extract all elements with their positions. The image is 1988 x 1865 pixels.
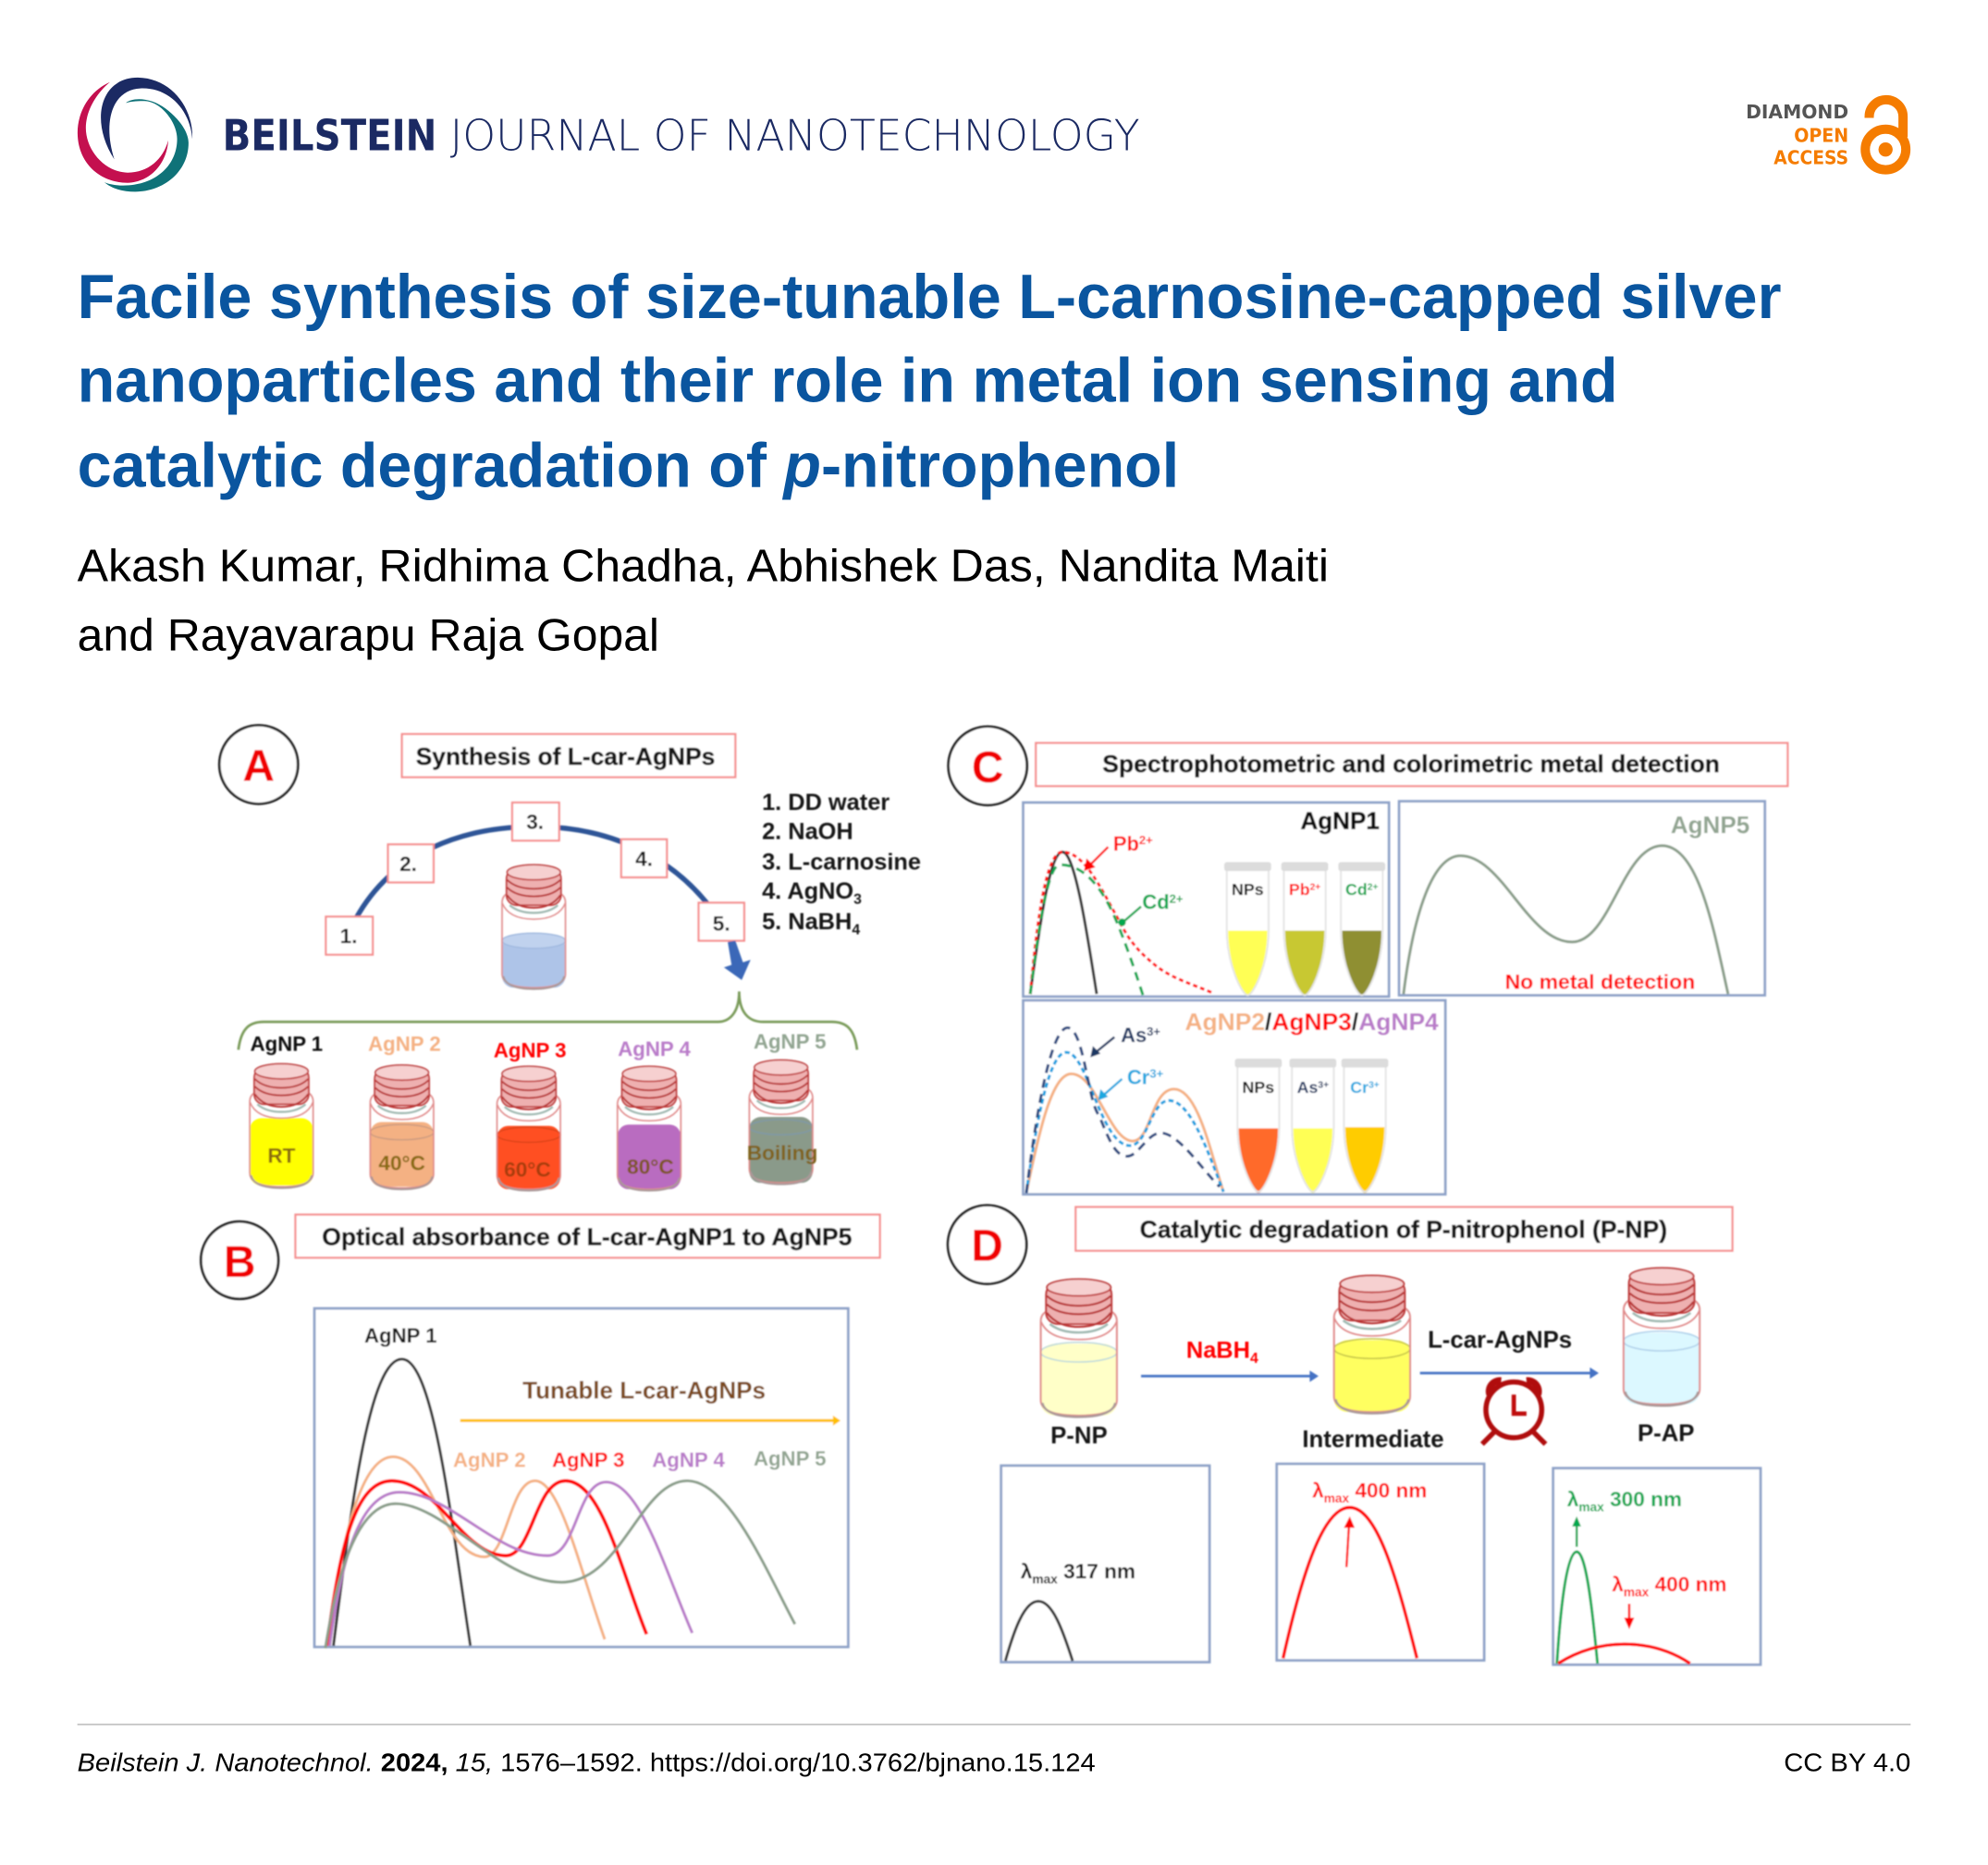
AgNP labels: AgNP 4 (618, 1037, 691, 1061)
step boxes 1 to 5 (325, 803, 744, 954)
series labels: AgNP 3 (552, 1448, 625, 1471)
Pb label and arrow (1084, 832, 1153, 871)
spectrum P-AP: max (1578, 1500, 1604, 1514)
spectrum P-NP: 317 nm (1058, 1560, 1135, 1583)
footer citation: Beilstein J. Nanotechnol. 2024, 15, 1576–1592. https://doi.org/10.3762/bjnano.15.124 (78, 1748, 1096, 1777)
spectrum intermediate: 400 nm (1349, 1479, 1427, 1502)
panel letter B (201, 1221, 278, 1299)
diamond open access label: ACCESS (1773, 146, 1848, 168)
Cr label and arrow (1098, 1065, 1164, 1100)
spectrum P-AP: λ (1567, 1488, 1578, 1511)
bottle labels: Intermediate (1302, 1427, 1444, 1453)
bottle AgNP 4 (618, 1066, 681, 1191)
tube Pb: 2+ (1310, 883, 1320, 893)
AgNP labels (251, 1030, 827, 1062)
panel letter D (948, 1205, 1026, 1283)
journal name: JOURNAL OF NANOTECHNOLOGY (450, 111, 1140, 161)
bottle P-NP (1041, 1279, 1117, 1417)
temperature labels (267, 1142, 817, 1181)
heading A: Synthesis of L-car-AgNPs (416, 742, 715, 770)
tube NPs: NPs (1232, 880, 1264, 899)
graphical abstract figure (201, 725, 1787, 1664)
tube Pb: Pb (1289, 880, 1310, 899)
spectrum P-NP: max (1032, 1573, 1058, 1587)
tube NPs (1235, 1059, 1282, 1193)
NaBH4 label: NaBH (1186, 1338, 1250, 1364)
spectrum P-AP (1553, 1468, 1761, 1664)
series labels: AgNP 2 (453, 1448, 526, 1471)
As label and arrow: As (1121, 1024, 1147, 1047)
tube As: As (1297, 1078, 1318, 1097)
tube Pb (1282, 862, 1328, 995)
icon: open access padlock (1865, 100, 1906, 170)
reagent list: 2. NaOH (762, 819, 853, 845)
panel letter C: C (972, 743, 1003, 792)
AgNP labels: AgNP 5 (754, 1030, 827, 1053)
heading C (1036, 743, 1787, 786)
AgNP labels: AgNP 2 (368, 1033, 441, 1056)
spectrum P-AP: 300 nm (1604, 1488, 1682, 1511)
spectrum intermediate: λ (1312, 1479, 1324, 1502)
reagent list: 1. DD water (762, 790, 890, 816)
AgNP labels: AgNP 1 (251, 1033, 323, 1056)
tube Cd (1338, 862, 1385, 995)
temperature labels: Boiling (747, 1142, 817, 1165)
journal name: BEILSTEIN (223, 111, 436, 161)
Cd label and arrow: Cd (1142, 890, 1170, 914)
journal logo: three swirl arcs (78, 78, 192, 191)
diamond open access label (1746, 101, 1848, 168)
bottle labels (1050, 1420, 1695, 1453)
tube Cd: Cd (1345, 880, 1368, 899)
step boxes 1 to 5: 5. (713, 912, 730, 935)
diamond open access label: OPEN (1794, 124, 1848, 146)
panel B: optical absorbance (201, 1215, 880, 1649)
tube Cr: 3+ (1368, 1080, 1380, 1090)
heading D: Catalytic degradation of P-nitrophenol (P-NP) (1140, 1215, 1667, 1243)
brace (239, 991, 857, 1049)
bottle intermediate (1334, 1275, 1410, 1414)
spectrum intermediate (1277, 1464, 1484, 1661)
title: nanoparticles and their role in metal ion sensing and (78, 347, 1618, 416)
arrow L-car-AgNPs (1420, 1368, 1599, 1379)
Pb label and arrow: 2+ (1139, 833, 1153, 847)
Cr label and arrow: 3+ (1149, 1066, 1164, 1080)
footer licence: CC BY 4.0 (1784, 1748, 1910, 1777)
panel D: catalytic degradation (948, 1205, 1761, 1664)
sub-panel AgNP1 (1024, 803, 1389, 997)
NaBH4 label: 4 (1250, 1351, 1258, 1367)
bottle labels: P-NP (1050, 1423, 1108, 1449)
sub-panel AgNP5 (1399, 802, 1765, 995)
Cr label and arrow: Cr (1127, 1065, 1149, 1088)
tube NPs: NPs (1243, 1078, 1274, 1097)
bottle labels: P-AP (1638, 1420, 1695, 1446)
panel letter C (949, 727, 1027, 805)
reagent list: 4. AgNO (762, 878, 853, 904)
arc of synthesis steps (356, 827, 713, 918)
bottle AgNP 1 (250, 1063, 313, 1188)
reagent list: 3. L-carnosine (762, 850, 921, 876)
absorbance chart (314, 1308, 848, 1649)
AgNP5 label: AgNP5 (1671, 811, 1749, 839)
AgNP2/3/4 label: AgNP2/AgNP3/AgNP4 (1184, 1008, 1439, 1036)
spectrum P-AP: max (1624, 1585, 1650, 1599)
temperature labels: 40°C (378, 1152, 425, 1175)
title: Facile synthesis of size-tunable L-carnosine-capped silver (78, 263, 1781, 332)
step boxes 1 to 5: 4. (635, 848, 653, 871)
tube As (1289, 1059, 1336, 1193)
As label and arrow (1090, 1024, 1160, 1058)
temperature labels: 80°C (627, 1156, 674, 1179)
central bottle (502, 865, 566, 989)
panel letter D: D (971, 1222, 1003, 1271)
tube Cr: Cr (1350, 1078, 1368, 1097)
AgNP labels: AgNP 3 (494, 1039, 566, 1062)
tube As: 3+ (1318, 1080, 1329, 1090)
arrow down from step 5 (724, 940, 751, 980)
sub-panel AgNP2/3/4 (1024, 1000, 1445, 1195)
step boxes 1 to 5: 3. (526, 811, 544, 834)
heading D (1075, 1207, 1733, 1251)
AgNP 1 label: AgNP 1 (364, 1324, 437, 1347)
icon: alarm clock (1482, 1380, 1545, 1444)
step boxes 1 to 5: 2. (399, 853, 417, 876)
no metal detection label: No metal detection (1505, 971, 1695, 994)
series labels (453, 1447, 827, 1471)
spectrum P-NP (1001, 1466, 1209, 1663)
heading C: Spectrophotometric and colorimetric metal detection (1102, 750, 1720, 778)
title: catalytic degradation of p-nitrophenol (78, 432, 1179, 501)
diamond open access label: DIAMOND (1746, 101, 1848, 123)
bottle AgNP 5 (749, 1060, 813, 1184)
Cd label and arrow (1118, 890, 1184, 926)
Pb label and arrow: Pb (1113, 832, 1139, 855)
panel C: metal detection (949, 727, 1787, 1195)
tube Cd: 2+ (1368, 883, 1379, 893)
temperature labels: RT (267, 1144, 296, 1167)
spectrum P-AP: λ (1612, 1573, 1624, 1596)
heading B: Optical absorbance of L-car-AgNP1 to AgNP5 (322, 1222, 852, 1250)
As label and arrow: 3+ (1147, 1025, 1160, 1038)
Cd label and arrow: 2+ (1170, 891, 1184, 905)
series labels: AgNP 5 (754, 1447, 827, 1470)
spectrum intermediate: max (1324, 1491, 1350, 1505)
title (78, 263, 1781, 501)
AgNP1 label: AgNP1 (1300, 807, 1380, 835)
panel letter A: A (242, 742, 275, 791)
reagent list (762, 790, 921, 939)
panel letter A (219, 725, 298, 804)
authors: Akash Kumar, Ridhima Chadha, Abhishek Das, Nandita Maiti (78, 542, 1329, 592)
tunable label: Tunable L-car-AgNPs (522, 1376, 766, 1404)
reagent list: 3 (853, 892, 862, 908)
heading B (295, 1215, 880, 1258)
step boxes 1 to 5: 1. (340, 925, 358, 948)
arrow NaBH4 (1141, 1370, 1319, 1382)
temperature labels: 60°C (504, 1158, 551, 1181)
reagent list: 4 (852, 923, 860, 939)
authors: and Rayavarapu Raja Gopal (78, 610, 659, 660)
spectrum P-AP: 400 nm (1649, 1573, 1727, 1596)
panel A: synthesis (219, 725, 921, 1191)
tube Cr (1342, 1059, 1388, 1193)
panel letter B: B (224, 1238, 255, 1287)
bottle AgNP 2 (370, 1065, 434, 1189)
heading A (402, 734, 735, 778)
bottle P-AP (1624, 1268, 1700, 1405)
L-car-AgNPs label: L-car-AgNPs (1428, 1328, 1572, 1354)
tube NPs (1224, 862, 1271, 995)
series labels: AgNP 4 (652, 1448, 725, 1471)
bottle AgNP 3 (497, 1066, 560, 1191)
reagent list: 5. NaBH (762, 909, 852, 935)
spectrum P-NP: λ (1021, 1560, 1032, 1583)
authors (78, 542, 1329, 660)
arrow: tunable direction (460, 1416, 841, 1426)
